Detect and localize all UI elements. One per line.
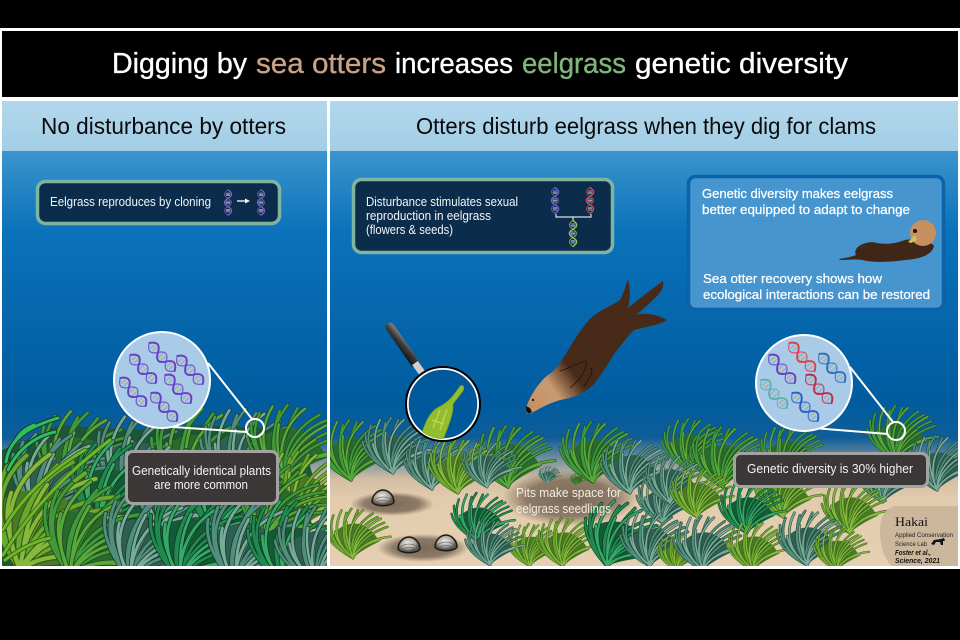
callout: sexual reproduction: Disturbance stimulates sexual [366, 195, 518, 209]
credits [880, 506, 958, 566]
right panel heading: Otters disturb eelgrass when they dig for clams [416, 113, 876, 139]
title banner: Digging by [112, 48, 247, 80]
callout: genetic diversity and recovery: Sea otter recovery shows how [703, 271, 883, 286]
icon: magnifying glass with flower [390, 327, 480, 441]
dense eelgrass meadow [2, 403, 327, 566]
seedlings [539, 466, 586, 485]
title banner: increases [395, 48, 513, 80]
title banner: eelgrass [522, 48, 626, 80]
left panel heading: No disturbance by otters [41, 113, 286, 139]
panel: no disturbance by otters [2, 101, 327, 566]
icon: floating sea otter [839, 220, 936, 262]
title banner [2, 31, 958, 97]
callout: genetic diversity is 30% higher [734, 454, 928, 486]
panel: otters disturb eelgrass [318, 101, 960, 583]
left panel water background [2, 151, 327, 566]
icon: diving sea otter [526, 279, 667, 414]
callout: genetic diversity and recovery [688, 176, 944, 310]
credits: Foster et al., [895, 550, 931, 557]
pits text: Pits make space for [516, 486, 621, 500]
callout: genetically identical plants: Genetically identical plants [132, 464, 271, 478]
callout: genetically identical plants [126, 452, 278, 504]
zoom callout: diverse DNA [756, 335, 905, 440]
right panel water and sand background [330, 151, 958, 566]
pits text [516, 486, 621, 516]
credits: Hakai [895, 514, 928, 529]
right panel heading [330, 101, 958, 151]
callout: genetically identical plants: are more common [154, 478, 248, 492]
eelgrass tufts [330, 404, 958, 566]
callout: genetic diversity and recovery: ecological interactions can be restored [703, 287, 930, 302]
title banner: genetic diversity [635, 48, 849, 80]
callout: reproduces by cloning [38, 182, 280, 224]
zoom callout: identical DNA [114, 332, 264, 437]
callout: sexual reproduction [354, 180, 612, 252]
icon: wolf [931, 538, 945, 545]
digging pits [350, 470, 638, 562]
pits text: eelgrass seedlings [516, 502, 611, 516]
callout: genetic diversity and recovery: better equipped to adapt to change [702, 202, 910, 217]
callout: sexual reproduction: (flowers & seeds) [366, 223, 453, 237]
callout: reproduces by cloning: Eelgrass reproduces by cloning [50, 195, 211, 209]
clams [372, 490, 457, 553]
title banner: sea otters [256, 48, 386, 80]
credits: Science, 2021 [895, 558, 940, 565]
credits: Science Lab [895, 541, 927, 548]
callout: sexual reproduction: reproduction in eelgrass [366, 209, 491, 223]
callout: genetic diversity and recovery: Genetic diversity makes eelgrass [702, 186, 893, 201]
credits: Applied Conservation [895, 532, 953, 539]
left panel heading [2, 101, 327, 151]
callout: genetic diversity is 30% higher: Genetic diversity is 30% higher [747, 461, 914, 476]
